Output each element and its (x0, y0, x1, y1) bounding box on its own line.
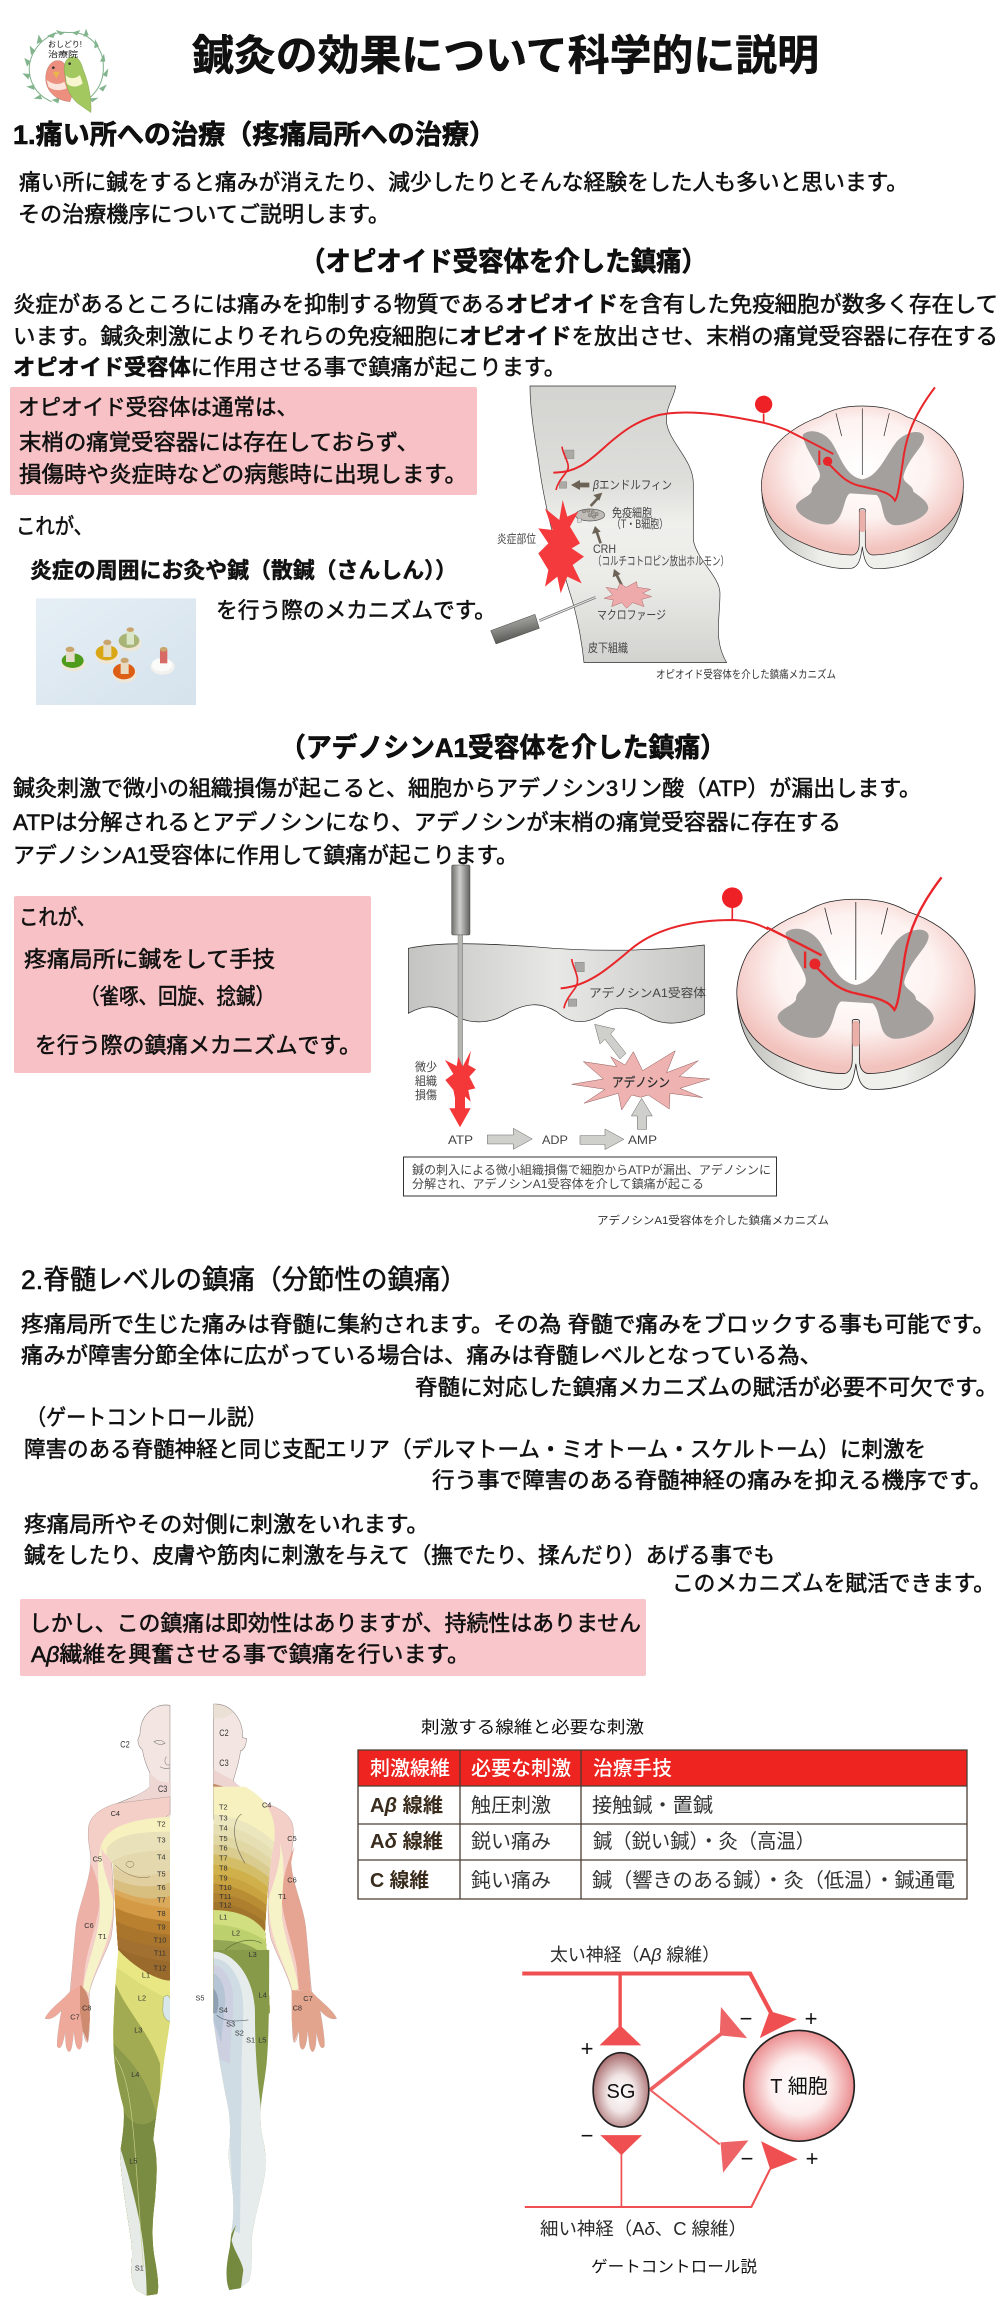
dermatome labels: L4 (131, 2070, 139, 2079)
spinal level explanation: 痛みが障害分節全体に広がっている場合は、痛みは脊髄レベルとなっている為、 (21, 1343, 822, 1368)
pink callout: needle technique: （雀啄、回旋、捻鍼） (80, 984, 275, 1009)
dermatome labels: T3 (157, 1836, 166, 1845)
nerve labels: 太い神経（Aβ 線維） (550, 1945, 720, 1965)
pink callout: opioid receptor (10, 387, 477, 495)
heads and necks: C2 (219, 1728, 229, 1738)
cell labels: SG (607, 2081, 635, 2103)
diagram labels: アデノシン (612, 1075, 670, 1090)
table: fibres and stimulation (358, 1750, 967, 1899)
back figure: sacral and leg zones (213, 1950, 270, 2290)
dermatome labels: T4 (157, 1852, 166, 1861)
note box (404, 1157, 776, 1196)
spinal cord cross-section (737, 877, 975, 1089)
text: this is: これが、 (16, 514, 93, 539)
opioid explanation text: オピオイド受容体に作用させる事で鎮痛が起こります。 (13, 355, 566, 380)
dermatome labels: L5 (129, 2156, 137, 2165)
diagram labels: アデノシンA1受容体 (589, 985, 706, 1000)
plus and minus signs: − (581, 2123, 593, 2148)
logo text (48, 40, 82, 59)
diagram labels: CRH (593, 542, 616, 556)
pink callout: immediate effect: Aβ繊維を興奮させる事で鎮痛を行います。 (31, 1642, 470, 1667)
diagram labels: 炎症部位 (497, 532, 536, 546)
dermatome labels: S1 (246, 2036, 255, 2045)
dermatome labels: T10 (219, 1883, 232, 1892)
diagram labels: マクロファージ (597, 608, 666, 622)
front figure: arm (45, 1797, 170, 2052)
clinic logo: wreath and two birds (22, 29, 108, 113)
diagram caption: ゲートコントロール説 (591, 2258, 757, 2276)
stimulation explanation: このメカニズムを賦活できます。 (672, 1571, 995, 1596)
dermatome labels: T2 (157, 1820, 166, 1829)
table header row: 必要な刺激 (471, 1757, 571, 1780)
skin, needle and arrows (408, 865, 768, 1150)
pink callout: needle technique (14, 896, 371, 1073)
pink callout: immediate effect (20, 1599, 646, 1676)
diagram labels: 微少 (415, 1059, 437, 1074)
diagram labels: 皮下組織 (588, 641, 628, 655)
diagram caption: アデノシンA1受容体を介した鎮痛メカニズム (597, 1213, 829, 1227)
dermatome labels: T4 (219, 1824, 228, 1833)
table row: A delta: 鍼（鋭い鍼）・灸（高温） (593, 1830, 815, 1853)
back figure: torso bands (210, 1783, 277, 2017)
intro text: その治療機序についてご説明します。 (18, 202, 390, 227)
pink callout: needle technique: を行う際の鎮痛メカニズムです。 (35, 1033, 361, 1058)
dermatome labels: T7 (157, 1896, 166, 1905)
diagram labels: ADP (542, 1133, 568, 1147)
dermatome labels: S5 (195, 1994, 204, 2003)
stimulation explanation: 疼痛局所やその対側に刺激をいれます。 (24, 1512, 429, 1537)
intro text: 痛い所に鍼をすると痛みが消えたり、減少したりとそんな経験をした人も多いと思います。 (19, 170, 908, 195)
diagram: opioid receptor mechanism (491, 386, 963, 681)
plus and minus signs: + (806, 2146, 818, 2171)
opioid explanation text: います。鍼灸刺激によりそれらの免疫細胞に オピオイドを放出させ、末梢の痛覚受容器に存在する (13, 324, 998, 349)
dermatome labels: T5 (157, 1870, 166, 1879)
intro text (18, 170, 908, 227)
table row: C fibre: 鍼（響きのある鍼）・灸（低温）・鍼通電 (592, 1869, 955, 1892)
section heading 2: 2.脊髄レベルの鎮痛（分節性の鎮痛） (21, 1265, 467, 1295)
table row: A beta: 接触鍼・置鍼 (592, 1794, 713, 1817)
dermatome labels: C8 (293, 2004, 302, 2013)
diagram labels: 組織 (415, 1074, 437, 1088)
heads and necks (113, 1704, 270, 1819)
dermatome labels: T3 (219, 1814, 228, 1823)
adenosine explanation text: 鍼灸刺激で微小の組織損傷が起こると、細胞からアデノシン3リン酸（ATP）が漏出します。 (13, 776, 921, 801)
table row: A delta: Aδ 線維 (370, 1830, 443, 1853)
cell labels (607, 2075, 828, 2103)
front figure: torso bands (100, 1816, 170, 1981)
plus and minus signs: − (741, 2146, 753, 2171)
dermatome labels: C6 (287, 1875, 297, 1884)
dermatome labels: C5 (287, 1834, 297, 1843)
spinal cord cross-section (761, 387, 963, 569)
heads and necks: C3 (158, 1784, 168, 1794)
skin and inflammation shapes (491, 386, 787, 663)
diagram labels: AMP (628, 1133, 657, 1147)
table row: A beta (370, 1794, 713, 1817)
front figure: leg zones (113, 1950, 170, 2296)
opioid explanation text (13, 292, 998, 380)
dermatome labels: C7 (70, 2012, 80, 2021)
dermatome labels: T6 (219, 1844, 228, 1853)
diagram: adenosine A1 receptor mechanism (404, 865, 975, 1227)
table row: A delta: 鋭い痛み (471, 1830, 551, 1853)
dermatome labels: C5 (93, 1854, 102, 1863)
table row: C fibre (370, 1869, 955, 1892)
dermatome labels: T8 (157, 1909, 166, 1918)
dermatome labels: C7 (303, 1994, 313, 2003)
table row: C fibre: C 線維 (370, 1869, 429, 1892)
dermatome labels: L5 (258, 2036, 266, 2045)
diagram labels (497, 478, 729, 655)
adenosine explanation text: アデノシンA1受容体に作用して鎮痛が起こります。 (13, 843, 518, 868)
diagram labels: ATP (448, 1133, 473, 1147)
diagram labels: 損傷 (415, 1087, 437, 1102)
table header row (370, 1757, 672, 1780)
table row: A delta (370, 1830, 815, 1853)
gate control explanation (24, 1437, 992, 1493)
section heading 1: 1.痛い所への治療（疼痛局所への治療） (13, 120, 496, 150)
dermatome labels: T8 (219, 1864, 228, 1873)
cell labels: T 細胞 (770, 2075, 828, 2098)
dermatome labels: C4 (111, 1809, 120, 1818)
gate control diagram (522, 1945, 854, 2276)
dermatome labels: L4 (259, 1990, 267, 1999)
diagram labels: （T・B細胞） (612, 516, 668, 531)
dermatome labels: T12 (219, 1901, 232, 1910)
nerve lines, cells and synapses (522, 1974, 854, 2207)
table row: C fibre: 鈍い痛み (471, 1869, 551, 1892)
dermatome labels: S3 (226, 2020, 235, 2029)
plus and minus signs: + (581, 2036, 593, 2061)
plus and minus signs: − (740, 2006, 752, 2031)
body zones (45, 1783, 337, 2300)
dermatome labels: L2 (232, 1929, 240, 1938)
dermatome labels: L2 (138, 1994, 146, 2003)
text: moxa and needle around inflammation: 炎症の周囲にお灸や鍼（散鍼（さんしん）） (30, 558, 457, 583)
diagram caption: オピオイド受容体を介した鎮痛メカニズム (656, 667, 836, 681)
dermatome labels: L1 (219, 1912, 227, 1921)
dermatome labels: C8 (82, 2004, 91, 2013)
pink callout: opioid receptor: 損傷時や炎症時などの病態時に出現します。 (19, 462, 467, 487)
title: 鍼灸の効果について科学的に説明 (192, 32, 819, 79)
table header row: 刺激線維 (370, 1757, 450, 1780)
dermatome labels: T11 (219, 1892, 231, 1901)
table row: A beta: Aβ 線維 (370, 1794, 443, 1817)
dermatome labels: L1 (142, 1971, 150, 1980)
dermatome labels: T1 (278, 1892, 287, 1901)
table title: 刺激する線維と必要な刺激 (421, 1718, 644, 1737)
adenosine explanation text: ATPは分解されるとアデノシンになり、アデノシンが末梢の痛覚受容器に存在する (13, 810, 841, 835)
dermatome labels: S1 (135, 2264, 144, 2273)
heads and necks: T1 (219, 1794, 228, 1804)
text: mechanism: を行う際のメカニズムです。 (216, 598, 496, 623)
subheading: opioid: （オピオイド受容体を介した鎮痛） (300, 247, 707, 277)
dermatome labels: T7 (219, 1854, 228, 1863)
dermatome labels: T2 (219, 1802, 228, 1811)
diagram labels: βエンドルフィン (592, 478, 672, 492)
dermatome labels: T12 (154, 1963, 166, 1972)
dermatome labels: C6 (84, 1921, 94, 1930)
spinal level explanation: 脊髄に対応した鎮痛メカニズムの賦活が必要不可欠です。 (415, 1375, 998, 1400)
dermatome labels: T1 (98, 1932, 107, 1941)
dermatome labels: L3 (134, 2025, 142, 2034)
back figure: arm (242, 1790, 337, 2052)
logo text: おしどり! (48, 40, 82, 49)
pink callout: opioid receptor: オピオイド受容体は通常は、 (18, 395, 298, 420)
plus and minus signs (581, 2006, 818, 2171)
dermatome labels: T9 (219, 1873, 228, 1882)
dermatome labels: T11 (154, 1949, 166, 1958)
dermatome labels: L3 (249, 1950, 257, 1959)
adenosine explanation text (13, 776, 921, 868)
logo text: 治療院 (48, 49, 78, 59)
dermatome labels: T9 (157, 1922, 166, 1931)
stimulation explanation (24, 1512, 995, 1596)
spinal level explanation: 疼痛局所で生じた痛みは脊髄に集約されます。その為 脊髄で痛みをブロックする事も可能です。 (21, 1312, 995, 1337)
dermatome labels: T10 (154, 1936, 166, 1945)
pink callout: needle technique: 疼痛局所に鍼をして手技 (24, 947, 275, 972)
dermatome labels: C4 (262, 1800, 271, 1809)
plus and minus signs: + (805, 2006, 817, 2031)
nerve labels (540, 1945, 747, 2239)
dermatome labels: S2 (235, 2029, 244, 2038)
pink callout: immediate effect: しかし、この鎮痛は即効性はありますが、持続性はありません (29, 1611, 641, 1636)
spinal level explanation (21, 1312, 998, 1400)
gate control explanation: 行う事で障害のある脊髄神経の痛みを抑える機序です。 (432, 1468, 992, 1493)
gate control explanation: 障害のある脊髄神経と同じ支配エリア（デルマトーム・ミオトーム・スケルトーム）に刺激を (24, 1437, 926, 1462)
stimulation explanation: 鍼をしたり、皮膚や筋肉に刺激を与えて（撫でたり、揉んだり）あげる事でも (24, 1543, 775, 1568)
dermatome labels (70, 1800, 313, 2273)
dermatome labels: T6 (157, 1883, 166, 1892)
gate control heading: （ゲートコントロール説） (26, 1405, 267, 1430)
opioid explanation text: 炎症があるところには痛みを抑制する物質である オピオイドを含有した免疫細胞が数多く存在して (13, 292, 998, 317)
diagram labels (415, 985, 706, 1147)
pink callout: needle technique: これが、 (19, 905, 96, 930)
note box: 鍼の刺入による微小組織損傷で細胞からATPが漏出、アデノシンに (412, 1162, 771, 1177)
pink callout: opioid receptor: 末梢の痛覚受容器には存在しておらず、 (19, 430, 419, 455)
table row: A beta: 触圧刺激 (471, 1794, 551, 1817)
dermatome body chart (45, 1704, 337, 2300)
note box: 分解され、アデノシンA1受容体を介して鎮痛が起こる (412, 1176, 704, 1191)
diagram labels: 免疫細胞 (612, 505, 652, 520)
nerve labels: 細い神経（Aδ、C 線維） (540, 2219, 747, 2239)
diagram labels: （コルチコトロピン放出ホルモン） (593, 553, 729, 568)
subheading: adenosine: （アデノシンA1受容体を介した鎮痛） (280, 732, 726, 763)
dermatome labels: S4 (219, 2006, 228, 2015)
photo: moxa cones (36, 598, 196, 705)
table header row: 治療手技 (593, 1757, 672, 1780)
dermatome labels: T5 (219, 1834, 228, 1843)
heads and necks: C2 (120, 1740, 130, 1750)
heads and necks: C3 (219, 1758, 229, 1768)
